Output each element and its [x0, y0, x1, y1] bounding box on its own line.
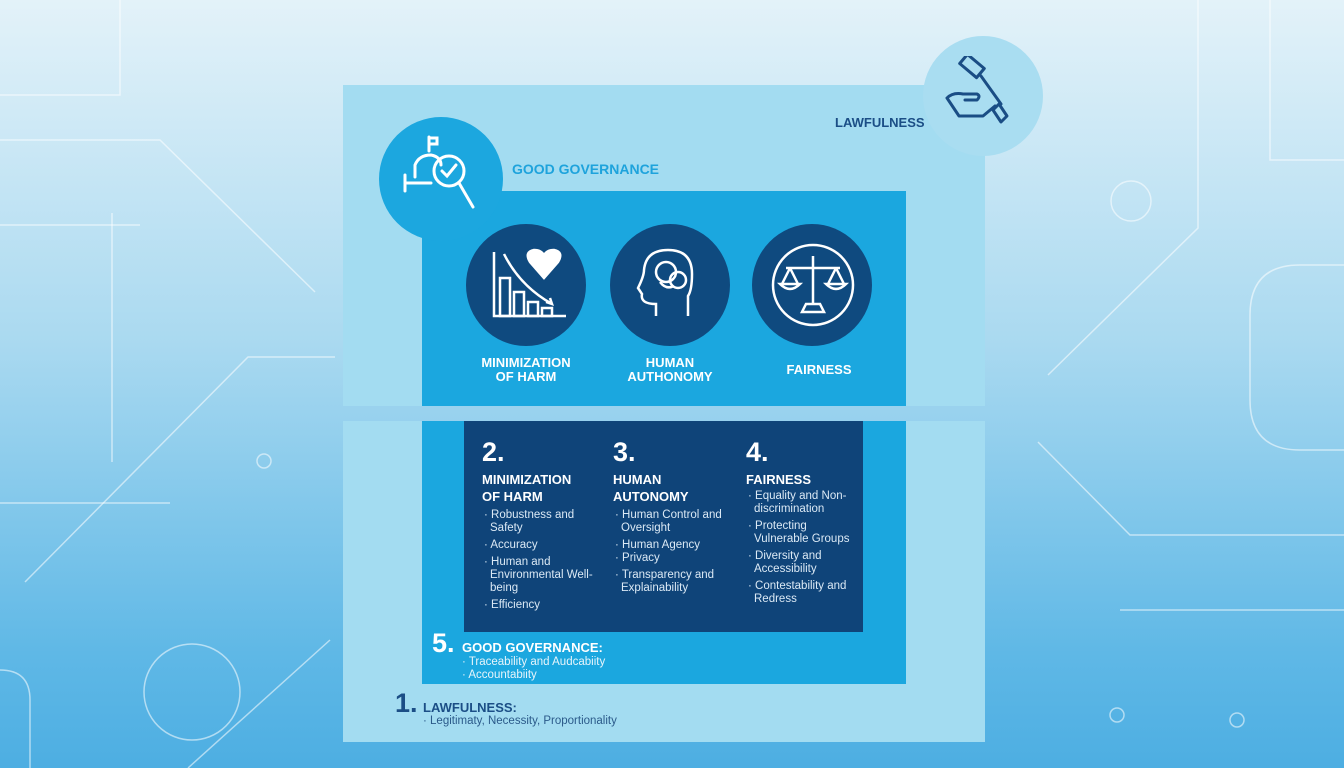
label: minimization of harm: MINIMIZATION — [481, 355, 571, 370]
column 4: · Contestability and Redress — [748, 580, 846, 605]
label: human autonomy: HUMAN — [646, 355, 694, 370]
icon: gavel hand — [945, 56, 1008, 124]
column 4: · Diversity and Accessibility — [748, 550, 822, 575]
column 4 — [746, 437, 850, 605]
top panel — [343, 85, 985, 406]
column 2: · Accuracy — [484, 539, 538, 551]
column 3: AUTONOMY — [613, 489, 689, 504]
column 4: FAIRNESS — [746, 472, 811, 487]
column 2 — [482, 437, 593, 611]
column 3: · Human Agency — [615, 539, 700, 551]
column 2: MINIMIZATION — [482, 472, 571, 487]
good governance item: GOOD GOVERNANCE: — [462, 640, 603, 655]
column 3: · Human Control and Oversight — [615, 509, 722, 534]
good governance item: 5. — [432, 628, 455, 658]
label: minimization of harm — [481, 355, 571, 384]
column 2: · Robustness and Safety — [484, 509, 574, 534]
column 2: · Efficiency — [484, 599, 540, 611]
label: fairness: FAIRNESS — [786, 362, 852, 377]
column 4: · Equality and Non-discrimination — [748, 490, 846, 515]
column 3: 3. — [613, 437, 636, 467]
dark detail panel — [464, 421, 863, 632]
column 4: 4. — [746, 437, 769, 467]
lawfulness label: LAWFULNESS — [835, 115, 925, 130]
good governance item: · Accountabiity — [462, 669, 537, 681]
good governance item — [432, 628, 606, 681]
lawfulness item: LAWFULNESS: — [423, 700, 517, 715]
inner blue panel top — [422, 191, 906, 406]
lawfulness item: · Legitimaty, Necessity, Proportionality — [423, 715, 617, 727]
column 2: 2. — [482, 437, 505, 467]
column 3: · Privacy — [615, 552, 660, 564]
column 2: · Human and Environmental Well-being — [484, 556, 593, 594]
label: human autonomy — [627, 355, 713, 384]
column 2: OF HARM — [482, 489, 543, 504]
column 3 — [613, 437, 722, 594]
column 4: · Protecting Vulnerable Groups — [748, 520, 849, 545]
icon: magnifier check — [404, 136, 475, 209]
icon circle: fairness — [752, 224, 872, 346]
label: human autonomy: AUTHONOMY — [627, 369, 713, 384]
inner blue panel bottom — [422, 421, 906, 684]
good governance circle — [379, 117, 503, 241]
column 3: HUMAN — [613, 472, 661, 487]
lawfulness item — [395, 688, 617, 727]
good governance item: · Traceability and Audcabiity — [462, 656, 605, 668]
bottom panel — [343, 421, 985, 742]
good governance label: GOOD GOVERNANCE — [512, 161, 659, 177]
lawfulness item: 1. — [395, 688, 418, 718]
label: minimization of harm: OF HARM — [496, 369, 556, 384]
icon circle: human autonomy — [610, 224, 730, 346]
icon circle: minimization of harm — [466, 224, 586, 346]
lawfulness circle — [923, 36, 1043, 156]
column 3: · Transparency and Explainability — [615, 569, 714, 594]
